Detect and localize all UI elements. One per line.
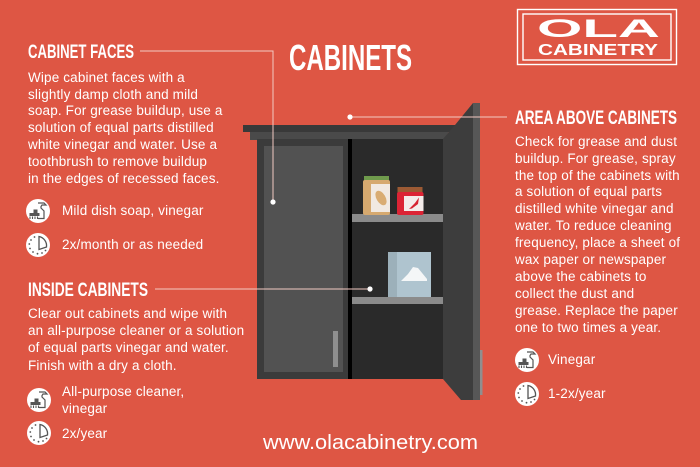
leader line: area above cabinets [347, 114, 507, 120]
text block: area above cabinets: buildup. For grease, spray [515, 151, 676, 166]
text block: area above cabinets: the top of the cabinets with [515, 168, 680, 183]
baking soda box [388, 252, 431, 297]
logo: OLA [537, 15, 660, 43]
text block: inside cabinets: Clear out cabinets and wipe with [28, 306, 227, 321]
closed door [257, 139, 348, 379]
text block: inside cabinets: of equal parts vinegar and water. [28, 340, 229, 355]
supplies text: All-purpose cleaner, [62, 384, 184, 399]
upper shelf [352, 214, 443, 222]
text block: cabinet faces: white vinegar and water. Use a [27, 137, 217, 152]
supplies text: Mild dish soap, vinegar [62, 203, 204, 218]
text block: area above cabinets: wax paper or newspaper [514, 252, 666, 267]
leader line: inside cabinets [155, 286, 373, 292]
panel: area above cabinets [514, 108, 684, 406]
text block: area above cabinets: grease. Replace the paper [515, 303, 678, 318]
frequency text: 2x/year [62, 426, 108, 441]
text block: cabinet faces: toothbrush to remove buildup [28, 154, 207, 169]
icon: cleaning supplies [515, 348, 539, 372]
text block: area above cabinets: collect the dust and [515, 286, 634, 301]
text block: area above cabinets: above the cabinets to [515, 269, 646, 284]
logo [518, 10, 676, 64]
lower shelf [352, 297, 443, 304]
text block: area above cabinets: one to two times a year. [515, 320, 661, 335]
logo: CABINETRY [538, 42, 658, 59]
text block: area above cabinets: frequency, place a sheet of [515, 235, 680, 250]
website url: www.olacabinetry.com [262, 432, 478, 454]
leader line: cabinet faces [140, 51, 276, 205]
icon: cleaning supplies [26, 199, 50, 223]
frequency text: 1-2x/year [548, 386, 606, 401]
text block: cabinet faces: in the edges of recessed faces. [28, 171, 220, 186]
text block: area above cabinets: a solution of equal parts [515, 184, 662, 199]
icon: clock [26, 233, 50, 257]
text block: area above cabinets: Check for grease and dust [515, 134, 677, 149]
frequency text: 2x/month or as needed [62, 237, 203, 252]
supplies text: vinegar [62, 401, 108, 416]
supplies text: Vinegar [548, 352, 596, 367]
icon: cleaning supplies [27, 388, 51, 412]
open door [443, 103, 482, 400]
heading: cabinet faces: CABINET FACES [28, 42, 134, 63]
cabinet illustration [243, 103, 482, 400]
icon: clock [515, 382, 539, 406]
centre gap [348, 139, 352, 379]
text block: cabinet faces: soap. For grease buildup, use a [28, 103, 223, 118]
heading: inside cabinets: INSIDE CABINETS [28, 280, 148, 301]
text block: cabinet faces: solution of equal parts distilled [28, 120, 214, 135]
text block: area above cabinets: distilled white vinegar and [515, 201, 674, 216]
chili jar [397, 187, 424, 215]
text block: inside cabinets: Finish with a dry a cloth. [28, 358, 177, 373]
peanut butter jar [363, 176, 390, 215]
panel: cabinet faces [26, 42, 226, 257]
text block: inside cabinets: an all-purpose cleaner or a solution [28, 323, 244, 338]
cabinet interior [352, 139, 443, 379]
text block: cabinet faces: Wipe cabinet faces with a [28, 70, 185, 85]
text block: area above cabinets: water. To reduce cleaning [514, 218, 672, 233]
panel: inside cabinets [27, 280, 248, 445]
title: CABINETS [289, 37, 412, 78]
cabinet crown moulding [243, 125, 456, 140]
text block: cabinet faces: slightly damp cloth and mild [28, 87, 198, 102]
icon: clock [27, 421, 51, 445]
